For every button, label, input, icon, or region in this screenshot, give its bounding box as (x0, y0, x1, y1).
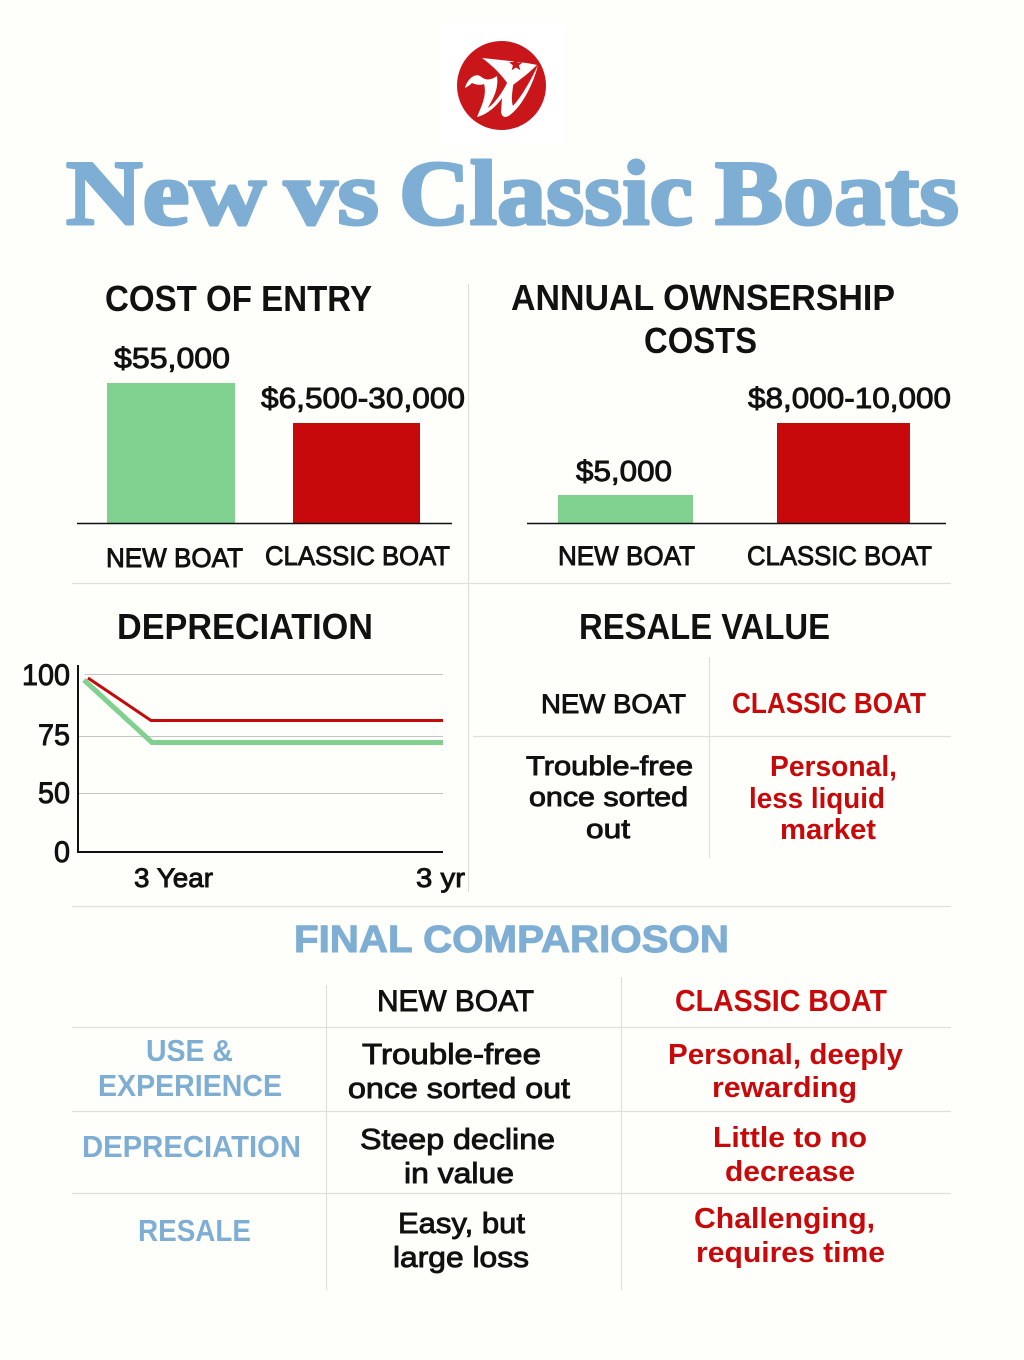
row: use and experience (98, 1033, 903, 1105)
title: Classic (399, 142, 693, 244)
bar chart: annual ownership costs: CLASSIC BOAT (747, 541, 932, 571)
panel: final comparison (72, 919, 951, 1290)
table header row (377, 983, 887, 1018)
icon: red circular W logo (457, 41, 546, 130)
line chart: depreciation: 100 (22, 659, 70, 692)
panel: annual ownership costs (511, 277, 951, 571)
panel: depreciation (22, 606, 465, 893)
row: depreciation (82, 1122, 867, 1190)
line chart: depreciation: 75 (38, 719, 70, 752)
title: Boats (715, 142, 959, 244)
title (66, 142, 959, 244)
column: classic boat: CLASSIC BOAT (732, 688, 926, 720)
row: use and experience: USE & (146, 1033, 233, 1068)
bar chart: annual ownership costs: NEW BOAT (558, 541, 695, 571)
row: resale: RESALE (138, 1213, 251, 1248)
row: resale: Challenging, (694, 1203, 875, 1235)
column: new boat: once sorted (529, 782, 688, 812)
row: resale: requires time (696, 1237, 885, 1269)
heading: cost of entry: COST OF ENTRY (105, 278, 372, 319)
column: new boat: out (586, 814, 631, 844)
bar chart: annual ownership costs: $8,000-10,000 (748, 383, 951, 415)
column: classic boat: less liquid (749, 783, 885, 815)
line chart: depreciation: 50 (38, 777, 70, 810)
line chart: depreciation (22, 659, 465, 893)
heading: depreciation: DEPRECIATION (117, 606, 373, 647)
bar chart: cost of entry: $55,000 (114, 343, 230, 375)
bar chart: cost of entry (77, 343, 465, 573)
title: New (66, 142, 266, 244)
row: resale: large loss (393, 1242, 529, 1274)
heading: resale value: RESALE VALUE (579, 606, 830, 647)
column: classic boat: market (780, 814, 876, 846)
row: use and experience: EXPERIENCE (98, 1068, 282, 1103)
row: use and experience: Trouble-free (362, 1039, 541, 1071)
row: use and experience: Personal, deeply (668, 1039, 903, 1071)
row: depreciation: Little to no (713, 1122, 867, 1154)
line chart: depreciation: 0 (54, 836, 70, 869)
table header row: CLASSIC BOAT (675, 983, 887, 1018)
row: depreciation: decrease (725, 1156, 855, 1188)
row: resale: Easy, but (398, 1208, 525, 1240)
bar chart: annual ownership costs (527, 383, 951, 571)
table header row: NEW BOAT (377, 985, 534, 1018)
column: new boat: NEW BOAT (541, 689, 686, 719)
line chart: depreciation: 3 Year (134, 863, 213, 893)
panel: resale value (473, 606, 951, 858)
title: vs (284, 142, 379, 244)
bar chart: annual ownership costs: $5,000 (576, 456, 672, 488)
heading: annual ownership costs: COSTS (644, 320, 757, 361)
row: depreciation: Steep decline (360, 1124, 555, 1156)
column: new boat (526, 689, 693, 844)
row: use and experience: rewarding (712, 1072, 857, 1104)
row: use and experience: once sorted out (348, 1073, 570, 1105)
heading: annual ownership costs (511, 277, 895, 361)
bar chart: cost of entry: $6,500-30,000 (261, 383, 465, 415)
line chart: depreciation: 3 yr (416, 863, 465, 893)
panel: cost of entry (77, 278, 465, 573)
row: depreciation: in value (404, 1158, 514, 1190)
column: new boat: Trouble-free (526, 751, 693, 781)
row: resale (138, 1203, 885, 1274)
column: classic boat: Personal, (770, 751, 897, 783)
heading: final comparison: FINAL COMPARIOSON (294, 919, 729, 961)
bar chart: cost of entry: CLASSIC BOAT (265, 541, 450, 571)
row: depreciation: DEPRECIATION (82, 1129, 301, 1164)
column: classic boat (732, 688, 926, 846)
bar chart: cost of entry: NEW BOAT (106, 543, 243, 573)
heading: annual ownership costs: ANNUAL OWNSERSHIP (511, 277, 895, 318)
